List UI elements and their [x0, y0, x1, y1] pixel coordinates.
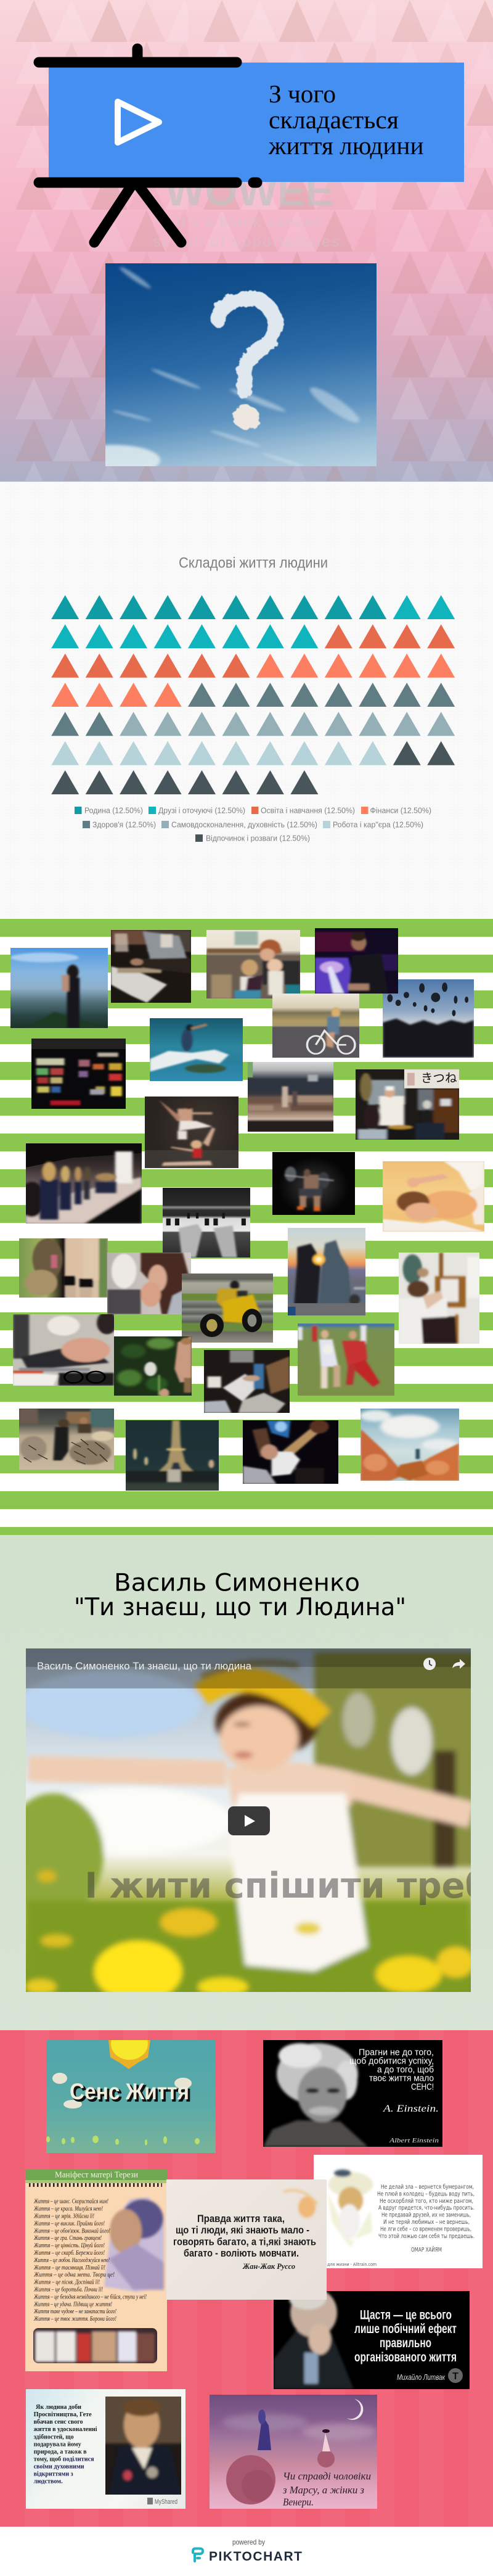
chart legend: Здоров'я (12.50%) [92, 820, 156, 829]
faint template text: WOWEE [165, 168, 333, 215]
panel: header with presentation board [0, 0, 493, 482]
Фінанси triangles [51, 654, 455, 707]
wordmark: PIKTOCHART [209, 2549, 302, 2564]
chart legend: Відпочинок і розваги (12.50%) [206, 834, 310, 842]
icon chart: triangles [51, 595, 455, 794]
image: Einstein quote: твоє життя мало [369, 2074, 434, 2084]
chart legend: Друзі і оточуючі (12.50%) [158, 805, 245, 815]
faint template text: so full of opportunities [153, 233, 340, 250]
image: Mother Teresa manifesto [25, 2170, 167, 2371]
video still: girl in flower field [3, 1652, 478, 2002]
title [268, 80, 424, 160]
image: Rousseau quote: Жан-Жак Руссо [242, 2262, 295, 2271]
image: Goethe slide: відкриттями з [34, 2471, 73, 2478]
photo: logs and timber [248, 1062, 333, 1132]
image: Mother Teresa manifesto: Життя – це мрія. Здійсни її! [33, 2213, 94, 2220]
photo: hands on piano [163, 1188, 250, 1257]
photo: notebooks on table [204, 1350, 290, 1413]
image: Mother Teresa manifesto: Життя – це скарб. Бережи його! [33, 2250, 105, 2257]
image: Goethe slide [26, 2389, 185, 2509]
image: Mother Teresa manifesto: Життя таке чудове – не занапасти його! [33, 2308, 116, 2315]
chart legend: Родина (12.50%) [84, 805, 143, 815]
image: Omar Khayyam poem: для жизни - Alltrain.com [327, 2262, 377, 2267]
faint template text: It's a blank canvas [176, 213, 321, 231]
video player [26, 1648, 471, 1992]
photo: typing on laptop [13, 1314, 114, 1386]
photo: massage [383, 1161, 484, 1232]
Самовдосконалення triangles [120, 712, 455, 736]
Освіта triangles [51, 624, 455, 678]
photo: woman on bicycle [272, 994, 359, 1058]
image: Mars and Venus: Венери. [283, 2496, 314, 2508]
image: Rousseau quote: Правда життя така, [197, 2213, 285, 2224]
image: Mother Teresa manifesto: Життя – це цінність. Цінуй його! [33, 2242, 105, 2249]
photo: weightlifter [272, 1152, 355, 1215]
photo: canyon with person [361, 1409, 459, 1481]
image: Mother Teresa manifesto: Життя – це краса. Милуйся нею! [33, 2206, 103, 2213]
photo: fashion runway [26, 1143, 142, 1224]
image: Lytvak quote: правильно [380, 2336, 431, 2350]
image: Mother Teresa manifesto: Життя – це удача. Підвищ це життя! [33, 2301, 112, 2308]
icon: clock and share [423, 1658, 465, 1670]
image: Mother Teresa manifesto: Життя – це обов'язок. Виконай його! [33, 2228, 110, 2234]
photo: woman on mountain [10, 948, 108, 1028]
photo: mother with children [206, 930, 300, 998]
Родина triangles [51, 595, 386, 619]
faint template text [153, 168, 340, 250]
image: Goethe slide: тому, щоб поділитися [34, 2456, 94, 2463]
icon: play triangle [118, 102, 159, 142]
photo: Japanese restaurant [356, 1069, 459, 1140]
image: Goethe slide: подарувала йому [34, 2440, 81, 2448]
image: Einstein quote: Прагни не до того, [359, 2048, 434, 2058]
heading: poem title: "Ти знаєш, що ти Людина" [74, 1594, 406, 1621]
image: Einstein quote: щоб добитися успіху, [349, 2057, 434, 2067]
photo: question mark cloud in the sky [105, 263, 377, 466]
image: Einstein quote: а до того, щоб [377, 2065, 434, 2075]
photo: soccer players [298, 1323, 394, 1396]
image: Rousseau quote: що ті люди, які знають мало - [176, 2225, 309, 2236]
image: Mars and Venus: Чи справді чоловіки [283, 2471, 371, 2482]
powered by text: powered by [232, 2538, 265, 2546]
image: Goethe slide: життя в удосконаленні [34, 2426, 97, 2433]
icon: presentation board [39, 49, 257, 242]
chart legend: Самовдосконалення, духовність (12.50%) [171, 820, 317, 829]
blue banner [49, 63, 464, 182]
heading: poem title: Василь Симоненко [114, 1569, 360, 1597]
image: Mars and Venus: з Марсу, а жінки з [282, 2484, 364, 2496]
image: Mother Teresa manifesto: Життя – це виклик. Прийми його! [33, 2220, 105, 2227]
image: Mother Teresa manifesto: Життя – це таємниця. Пізнай її! [33, 2265, 105, 2271]
panel: photo collage on green stripes [0, 919, 493, 1535]
icon: Piktochart logo [193, 2548, 203, 2561]
photo: woman painting [399, 1253, 479, 1344]
title: З чого [269, 80, 336, 108]
image: Goethe slide: людством. [34, 2478, 63, 2485]
chart legend [75, 805, 431, 842]
chart legend: Робота і кар"єра (12.50%) [333, 820, 423, 829]
image: Lytvak quote: Т [452, 2371, 458, 2382]
image: Mother Teresa manifesto: Маніфест матері Терези [55, 2171, 138, 2179]
image: Lytvak quote: Михайло Литвак [397, 2372, 446, 2382]
photo: girl and dandelion [114, 1336, 192, 1396]
image: Mars and Venus [210, 2395, 377, 2509]
photo: bookstore [31, 1039, 126, 1109]
image: Rousseau quote [166, 2179, 327, 2300]
image: Goethe slide: Просвітництва, Гете [34, 2411, 92, 2418]
image: Сенс Життя [46, 2040, 216, 2153]
photo: graduation caps [383, 979, 474, 1058]
photo: couple at sunset [288, 1228, 365, 1315]
photo: girl with phone [107, 1253, 191, 1314]
photo: fish market [19, 1409, 114, 1470]
Робота triangles [51, 741, 386, 765]
image: Mother Teresa manifesto: Життя – це пісня. Доспівай її! [33, 2279, 100, 2286]
image: Mother Teresa manifesto: Життя – це твоє життя. Борони його! [33, 2316, 116, 2323]
Друзі triangles [51, 595, 455, 648]
photo: water skiing [150, 1018, 243, 1081]
image: Goethe slide: Як людина доби [36, 2403, 82, 2411]
image: Mother Teresa manifesto: Життя – це гра. Стань гравцем! [33, 2235, 102, 2242]
footer: powered by Piktochart [0, 2527, 493, 2576]
chart legend: Фінанси (12.50%) [370, 805, 431, 815]
panel: quotes collage [0, 2030, 493, 2527]
image: Mother Teresa manifesto: Життя – це шанс. Скористайся ним! [33, 2199, 108, 2205]
image: Goethe slide: здібностей, що [34, 2433, 74, 2440]
image: Mother Teresa manifesto: Життя – це боротьба. Почни її! [33, 2287, 103, 2293]
video title: Василь Симоненко Ти знаєш, що ти людина [37, 1660, 251, 1672]
photo: electric guitar [243, 1420, 338, 1484]
photo: motorcycle [182, 1274, 273, 1343]
panel: chart section [0, 482, 493, 919]
icon: play button [228, 1806, 270, 1835]
image: Mother Teresa manifesto: Життя – це одна мета. Твори це! [33, 2272, 115, 2279]
heading: poem title [74, 1569, 406, 1621]
chart title: Складові життя людини [179, 555, 328, 572]
title: складається [269, 105, 399, 134]
image: Omar Khayyam poem [314, 2155, 483, 2268]
image: Mother Teresa manifesto: Життя – це любов. Насолоджуйся нею! [33, 2257, 110, 2264]
image: Goethe slide: природа, а також в [34, 2448, 87, 2455]
photo: desk with laptop [111, 930, 191, 1003]
image: Goethe slide: MyShared [155, 2498, 177, 2506]
image: Einstein quote: Albert Einstein [389, 2137, 439, 2144]
photo: dog and legs [19, 1238, 108, 1298]
image: Einstein quote: A. Einstein. [383, 2104, 439, 2114]
image: Goethe slide: своїми духовними [34, 2463, 84, 2471]
photo: dancers [145, 1097, 238, 1168]
photo: Eiffel tower at night [126, 1420, 219, 1491]
image: Сенс Життя: Сенс Життя [70, 2079, 189, 2104]
title: життя людини [268, 131, 424, 160]
image: Einstein quote: СЕНС! [411, 2083, 434, 2092]
image: Omar Khayyam poem: ОМАР ХАЙЯМ [411, 2246, 442, 2253]
image: Einstein quote [263, 2040, 442, 2147]
Здоров'я triangles [51, 683, 455, 736]
panel: poem video section [0, 1535, 493, 2030]
image: Goethe slide: вбачав сенс свого [34, 2418, 83, 2426]
photo: man with laptop in purple light [315, 928, 398, 994]
image: Сенс Життя: Сенс Життя [71, 2081, 191, 2106]
image: Rousseau quote: багато - воліють мовчати. [184, 2248, 299, 2259]
image: Lytvak quote [274, 2291, 470, 2389]
Відпочинок triangles [51, 741, 455, 794]
chart legend: Освіта і навчання (12.50%) [261, 805, 355, 815]
